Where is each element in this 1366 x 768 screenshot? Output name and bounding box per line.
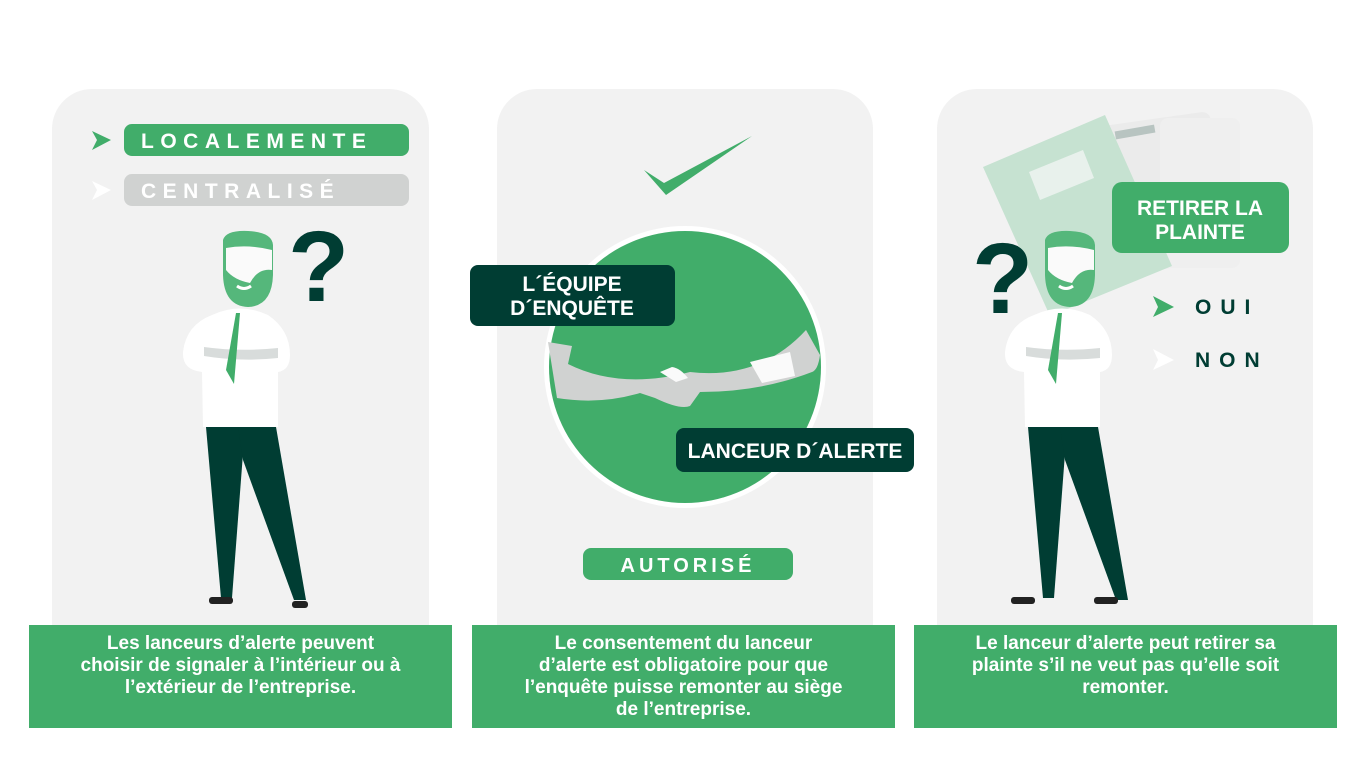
label: équipe d'enquête: L´ÉQUIPE bbox=[522, 273, 622, 296]
label: retirer la plainte: PLAINTE bbox=[1155, 221, 1245, 244]
icon: question mark right: ? bbox=[972, 223, 1033, 335]
badge: autorisé bbox=[583, 548, 793, 580]
icon: question mark left: ? bbox=[288, 211, 349, 323]
caption: right bbox=[914, 625, 1337, 728]
label: retirer la plainte bbox=[1112, 182, 1289, 253]
panel: right bbox=[937, 89, 1313, 689]
option: oui: OUI bbox=[1195, 296, 1259, 319]
badge: autorisé: AUTORISÉ bbox=[621, 554, 755, 577]
circle: handshake bbox=[544, 226, 826, 508]
label: équipe d'enquête: D´ENQUÊTE bbox=[510, 296, 634, 320]
icon: documents bbox=[983, 111, 1240, 316]
caption: right: remonter. bbox=[1082, 677, 1169, 698]
option: centralisé bbox=[92, 174, 409, 206]
caption: middle: de l’entreprise. bbox=[616, 699, 751, 720]
caption: left: l’extérieur de l’entreprise. bbox=[125, 677, 356, 698]
panel: left bbox=[52, 89, 429, 689]
caption: middle bbox=[472, 625, 895, 728]
caption: right: Le lanceur d’alerte peut retirer sa bbox=[976, 633, 1275, 654]
option: localemente: LOCALEMENTE bbox=[141, 130, 372, 153]
caption: left bbox=[29, 625, 452, 728]
caption: left: Les lanceurs d’alerte peuvent bbox=[107, 633, 374, 654]
option: localemente bbox=[92, 124, 409, 156]
option: non: NON bbox=[1195, 349, 1269, 372]
label: retirer la plainte: RETIRER LA bbox=[1137, 197, 1263, 220]
figure: left person bbox=[183, 231, 308, 608]
icon: checkmark bbox=[644, 136, 752, 195]
panel: middle bbox=[497, 89, 873, 689]
label: lanceur d'alerte bbox=[676, 428, 914, 472]
option: centralisé: CENTRALISÉ bbox=[141, 180, 340, 203]
caption: middle: l’enquête puisse remonter au siège bbox=[525, 677, 842, 698]
option: oui bbox=[1153, 296, 1259, 319]
label: lanceur d'alerte: LANCEUR D´ALERTE bbox=[688, 440, 902, 463]
caption: left: choisir de signaler à l’intérieur ou à bbox=[81, 655, 400, 676]
figure: right person bbox=[1005, 231, 1128, 604]
caption: middle: d’alerte est obligatoire pour que bbox=[539, 655, 828, 676]
label: équipe d'enquête bbox=[470, 265, 675, 326]
option: non bbox=[1153, 349, 1269, 372]
caption: right: plainte s’il ne veut pas qu’elle soit bbox=[972, 655, 1279, 676]
caption: middle: Le consentement du lanceur bbox=[555, 633, 812, 654]
